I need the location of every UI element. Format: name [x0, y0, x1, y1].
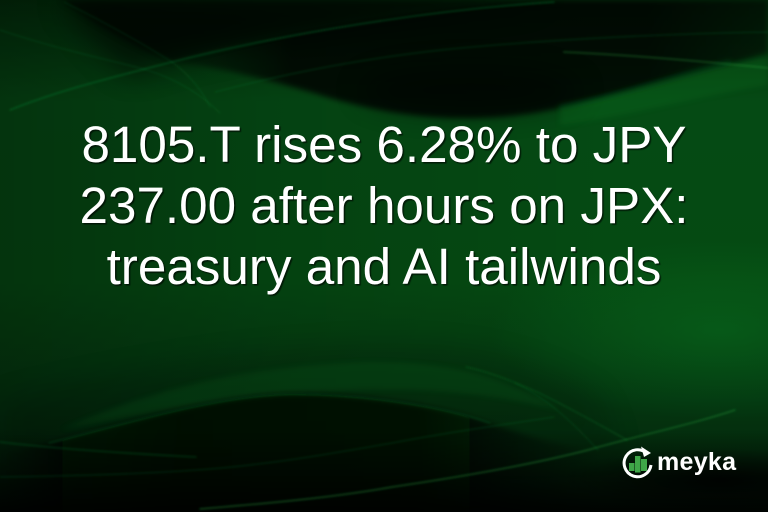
wordmark: meyka — [657, 448, 737, 476]
title — [80, 116, 688, 296]
title: 8105.T rises 6.28% to JPY — [81, 116, 687, 173]
title: treasury and AI tailwinds — [107, 238, 661, 295]
logo: meyka — [622, 446, 737, 478]
icon: circular arrow with bars — [624, 446, 651, 477]
title: 237.00 after hours on JPX: — [80, 177, 688, 234]
